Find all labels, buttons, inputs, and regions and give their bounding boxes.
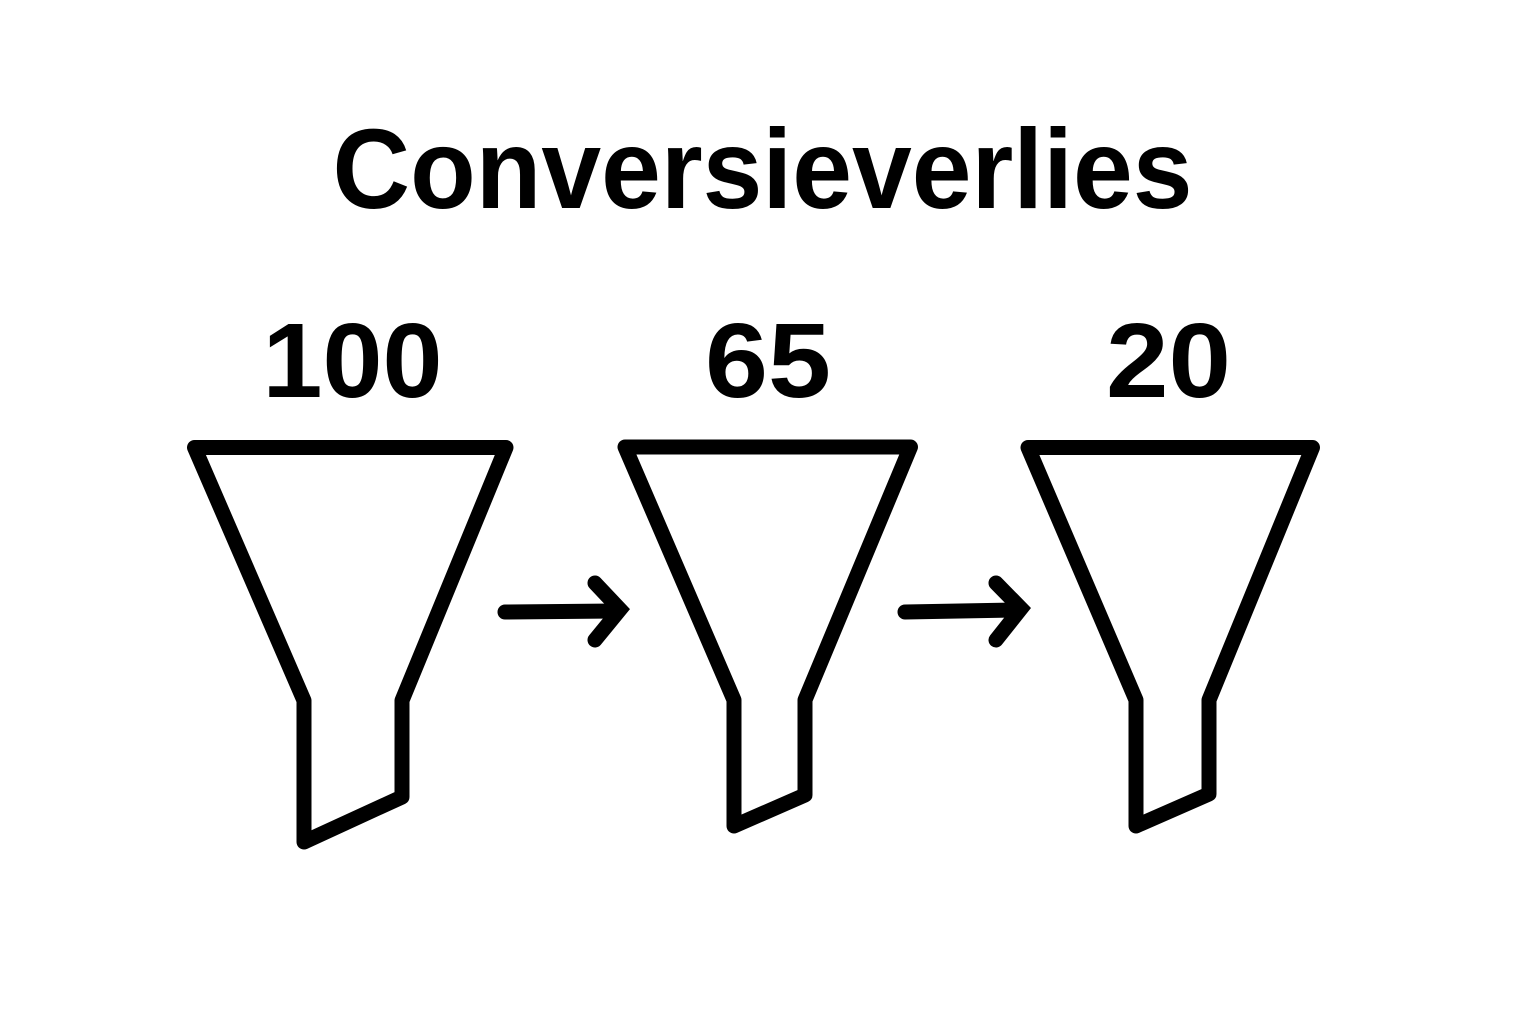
icon: funnel 3 xyxy=(1028,448,1312,826)
title: Conversieverlies xyxy=(332,106,1192,232)
icon: funnel 2 xyxy=(625,447,910,826)
arrow 2 xyxy=(905,583,1021,640)
number: 100: 100 xyxy=(262,302,442,420)
arrow 1 xyxy=(505,583,620,640)
number: 65: 65 xyxy=(705,302,831,420)
icon: funnel 1 xyxy=(194,448,506,842)
number: 20: 20 xyxy=(1106,302,1231,420)
